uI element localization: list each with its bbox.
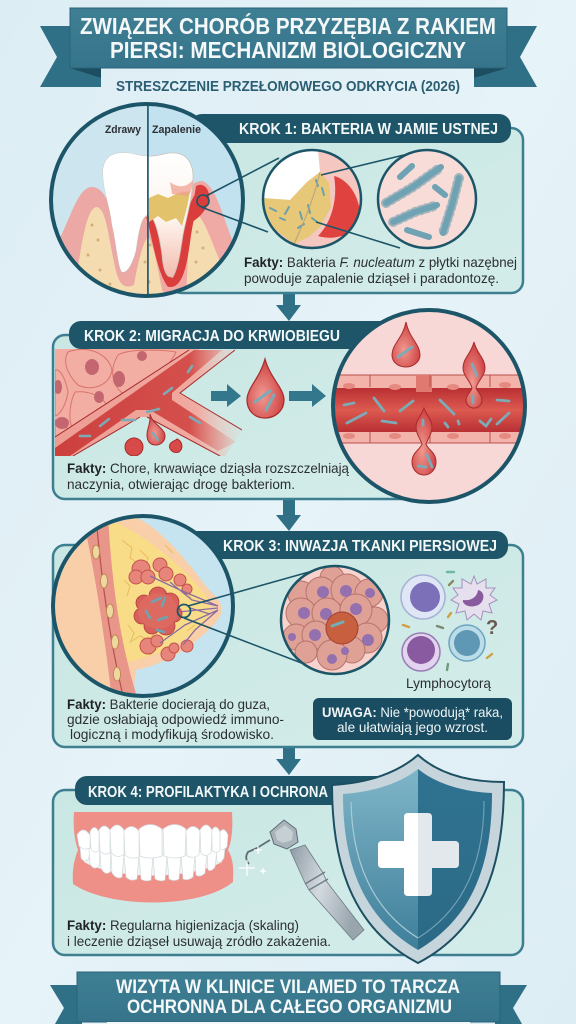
illustration: teeth [73,812,233,903]
step 2 header [69,321,409,349]
arrow right 1 [211,384,241,407]
closing message second line: OCHRONNA DLA CAŁEGO ORGANIZMU [127,997,452,1018]
facts step 3: gdzie osłabiają odpowiedź immuno- [67,711,284,727]
question mark: ? [486,617,498,639]
facts step 3: Fakty: Bakterie docierają do guza, [67,696,270,712]
step 1 header: KROK 1: BAKTERIA W JAMIE USTNEJ [239,121,498,138]
label inflamed: Zapalenie [152,124,201,136]
step 2 header: KROK 2: MIGRACJA DO KRWIOBIEGU [84,328,340,345]
facts step 3 [67,696,284,742]
title second line: PIERSI: MECHANIZM BIOLOGICZNY [110,37,466,63]
facts step 1 [244,254,517,286]
bacteria in droplets [398,347,477,467]
label lymphocytes: Lymphocytorą [406,675,491,691]
facts step 4 [67,917,331,949]
step 1 header [190,114,511,143]
warning callout: UWAGA: Nie *powodują* raka, [322,704,503,720]
label healthy: Zdrawy [105,124,142,136]
droplet escaping vessel [412,408,436,475]
magnified plaque circle [262,150,361,248]
connector lines [184,572,312,667]
facts step 1: Fakty: Bakteria F. nucleatum z płytki nazębnej [244,254,517,270]
facts step 2 [67,460,349,492]
closing message: WIZYTA W KLINICE VILAMED TO TARCZA [116,977,460,998]
illustration: leaky vessels in gum tissue [54,349,242,456]
icon: shield with cross [332,755,504,963]
cross [378,813,459,896]
warning callout: ale ułatwiają jego wzrost. [337,719,488,735]
step 3 header [185,531,508,559]
facts step 4: Fakty: Regularna higienizacja (skaling) [67,917,299,933]
facts step 1: powoduje zapalenie dziąseł i paradontozę. [244,270,499,286]
immune cells [401,572,498,671]
arrow: step 2 to 3 [276,498,301,531]
step 4 header [75,776,390,805]
arrow right 2 [289,384,326,407]
arrow: step 3 to 4 [276,746,301,775]
panel: step 2 [53,310,530,502]
illustration: breast anatomy with tumor [50,515,233,700]
illustration: dental handpiece [239,820,364,940]
illustration: blood vessel cross-section [330,310,530,502]
droplet passing through wall [463,342,485,408]
facts step 2: naczynia, otwierając drogę bakteriom. [67,476,295,492]
facts step 4: i leczenie dziąseł usuwają zródło zakażenia. [67,933,331,949]
warning callout [313,698,512,740]
facts step 3: logiczną i modyfikują środowisko. [70,726,274,742]
arrow: step 1 to 2 [276,292,301,321]
magnified bacteria circle [378,150,476,248]
subtitle: STRESZCZENIE PRZEŁOMOWEGO ODKRYCIA (2026) [116,78,460,95]
magnified tumor cells circle [281,566,389,674]
panel: step 1 [50,100,523,300]
central blood drop [247,359,284,418]
panel: step 4 [53,755,523,963]
title banner [40,8,537,87]
step 4 header: KROK 4: PROFILAKTYKA I OCHRONA [88,784,328,801]
facts step 2: Fakty: Chore, krwawiące dziąsła rozszczelniają [67,460,349,476]
illustration: healthy vs inflamed tooth [50,100,248,300]
title text: ZWIĄZEK CHORÓB PRZYZĘBIA Z RAKIEM [80,12,496,39]
step 3 header: KROK 3: INWAZJA TKANKI PIERSIOWEJ [223,538,497,555]
panel: step 3 [50,515,523,747]
connector lines [197,154,408,248]
bottom banner [50,972,527,1024]
droplet above vessel [392,322,420,367]
